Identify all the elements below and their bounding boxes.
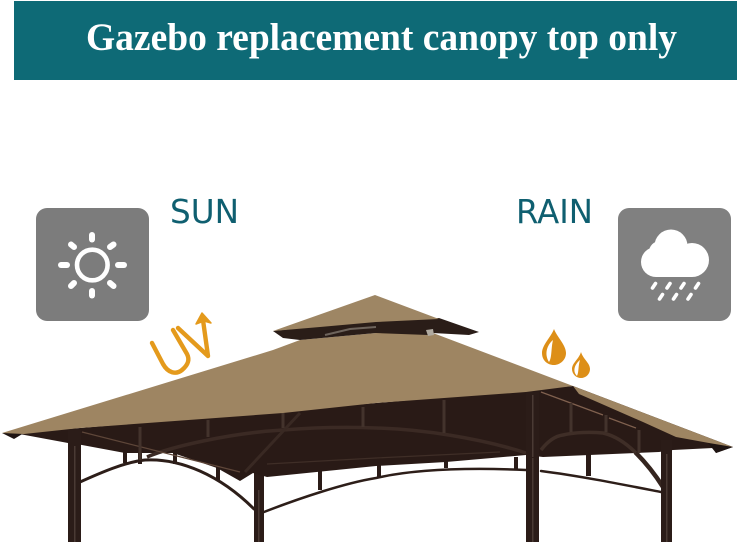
upper tier shadow	[273, 318, 479, 340]
heading: SUN: SUN	[170, 192, 239, 231]
gazebo canopy	[2, 295, 733, 542]
right eave tip	[708, 443, 733, 453]
heading: RAIN: RAIN	[516, 192, 593, 231]
upper canopy	[273, 295, 439, 331]
canopy underside	[14, 386, 733, 481]
title banner	[14, 1, 737, 80]
left eave tip	[2, 433, 24, 439]
icon: water drops	[542, 329, 590, 378]
title banner: Gazebo replacement canopy top only	[86, 16, 677, 59]
icon: sun tile	[36, 208, 149, 321]
frame over underside	[68, 392, 672, 472]
upper tier rafters	[325, 327, 376, 335]
icon: rain tile	[618, 208, 731, 321]
icon: UV arrow	[152, 313, 211, 373]
gazebo frame: legs and arches	[68, 392, 672, 542]
lower canopy	[2, 333, 733, 447]
upper tier bracket	[426, 329, 434, 336]
